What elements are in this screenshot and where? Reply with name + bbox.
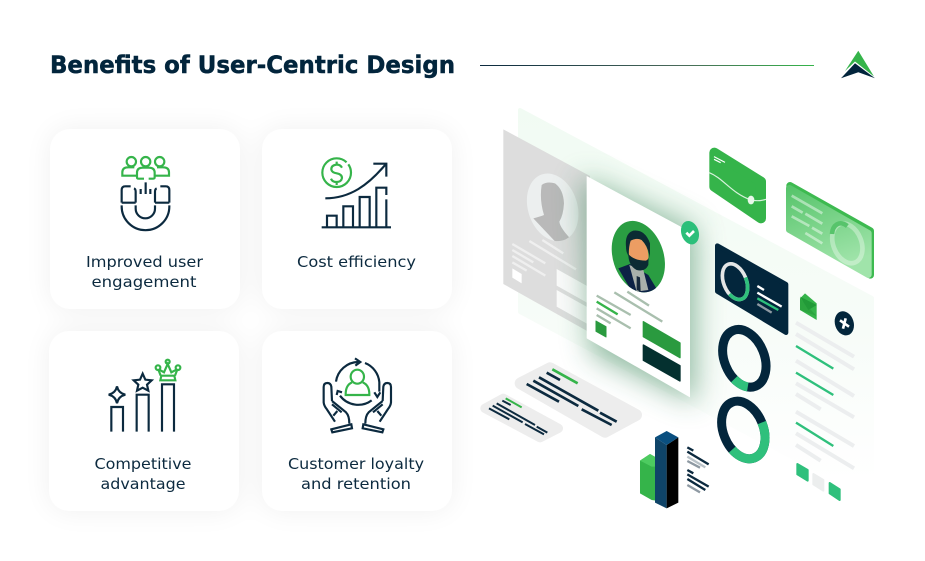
small squares (797, 464, 840, 500)
icon: plus badge (832, 309, 857, 338)
white card shadow (581, 176, 696, 404)
panel: grey profile sheet (503, 129, 590, 333)
chart card: green line (709, 153, 766, 218)
label: competitive advantage: advantage (100, 475, 186, 493)
title: Benefits of User-Centric Design (50, 51, 455, 79)
header rule (480, 65, 814, 66)
icon: rising bars with star and crown (109, 360, 180, 432)
panel: cost efficiency (262, 129, 452, 309)
label: customer loyalty and retention: and retention (301, 475, 411, 493)
bar chart: 3D bars (640, 431, 678, 508)
panel: pale green back sheet (520, 110, 872, 500)
chart card: light green donut (789, 186, 870, 275)
icon: envelope (800, 293, 817, 320)
label: cost efficiency: Cost efficiency (297, 253, 416, 271)
chart legend lines (687, 447, 709, 492)
illustration: isometric dashboard (485, 110, 872, 508)
check badge (678, 219, 702, 247)
text lines (796, 323, 854, 468)
donut chart: large green share (714, 395, 773, 465)
label: improved user engagement: engagement (92, 273, 197, 291)
chart card: dark donut (717, 246, 786, 333)
panel: competitive advantage (49, 331, 239, 511)
icon: people and magnet (122, 157, 169, 230)
icon: dollar and rising bars (322, 158, 391, 227)
icon: hands with person and cycle arrows (324, 358, 391, 432)
panel: white profile card (587, 176, 702, 397)
card shadows (49, 129, 452, 511)
profile lines (597, 292, 662, 328)
avatar (612, 220, 665, 292)
green highlights (796, 346, 833, 446)
label: customer loyalty and retention: Customer loyalty (288, 455, 424, 473)
label: improved user engagement: Improved user (86, 253, 204, 271)
right side widgets (709, 153, 870, 500)
panel: small text block (485, 398, 558, 438)
bottom widgets (485, 368, 709, 508)
panel: customer loyalty and retention (262, 331, 452, 511)
panel: improved user engagement (50, 129, 240, 309)
buttons (643, 322, 680, 358)
icon: logo (841, 51, 875, 78)
label: competitive advantage: Competitive (94, 455, 192, 473)
panel: large text block (521, 368, 636, 432)
donut chart: small green share (715, 323, 774, 394)
